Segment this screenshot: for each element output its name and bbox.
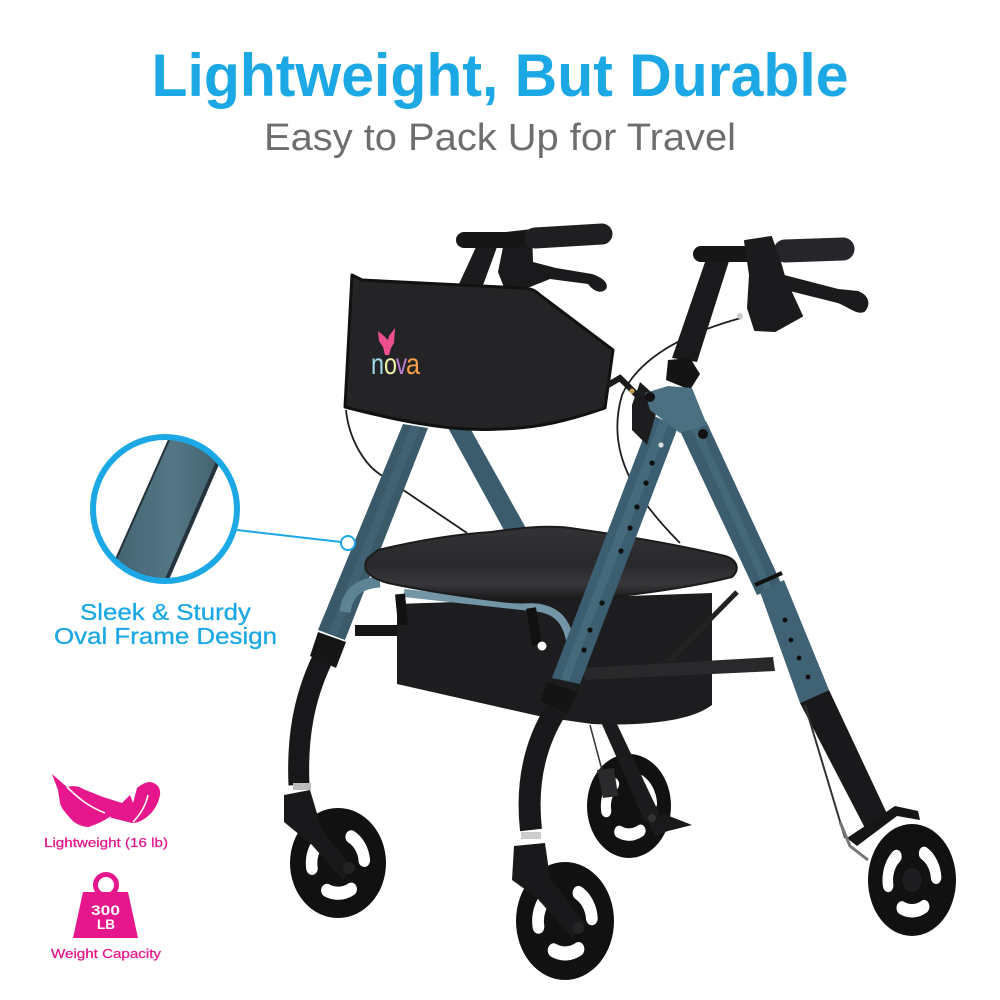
callout caption bbox=[54, 599, 277, 649]
subtitle: Easy to Pack Up for Travel bbox=[264, 117, 736, 159]
right rear tube bbox=[680, 421, 829, 703]
right rear black leg bbox=[800, 690, 890, 830]
back strut bbox=[447, 426, 527, 532]
nova logo wordmark bbox=[371, 348, 420, 381]
cable, rear bbox=[346, 318, 741, 543]
rear centre wheel bbox=[587, 722, 692, 858]
pivot joint bbox=[608, 378, 708, 445]
right rear cable bbox=[805, 705, 845, 838]
cross bar bbox=[355, 592, 775, 680]
icon: feather bbox=[52, 774, 160, 827]
nova logo wordmark: o bbox=[384, 348, 397, 381]
feather label: Lightweight (16 lb) bbox=[44, 835, 168, 850]
nova logo wordmark: n bbox=[371, 348, 384, 381]
icon: weight 300 lb bbox=[73, 874, 138, 938]
front black leg and collar bbox=[521, 682, 578, 839]
front main tube with adjustment holes bbox=[552, 415, 678, 684]
front handle post and brake lever bbox=[666, 237, 867, 390]
front caster wheel bbox=[512, 843, 614, 980]
under-seat basket bbox=[397, 593, 712, 724]
left frame tube bbox=[318, 424, 428, 640]
callout caption: Sleek & Sturdy bbox=[80, 599, 252, 625]
icon: weight 300 lb: 300 bbox=[91, 902, 120, 918]
callout caption: Oval Frame Design bbox=[54, 623, 277, 649]
weight label: Weight Capacity bbox=[51, 946, 162, 961]
rear handle post and lever bbox=[459, 229, 607, 292]
seat rails bbox=[345, 582, 570, 650]
backrest with nova logo bbox=[345, 275, 613, 429]
nova logo butterfly bbox=[378, 328, 395, 355]
left caster wheel and leg bbox=[284, 632, 386, 918]
inset detail circle: oval frame bbox=[90, 434, 240, 584]
rollator walker product illustration bbox=[284, 229, 956, 980]
icon: weight 300 lb: LB bbox=[97, 916, 115, 932]
callout leader line bbox=[237, 530, 355, 550]
seat cushion bbox=[365, 527, 737, 602]
right wheel with fender bbox=[840, 806, 956, 936]
title: Lightweight, But Durable bbox=[152, 42, 848, 109]
nova logo wordmark: v bbox=[396, 348, 407, 381]
nova logo wordmark: a bbox=[406, 348, 420, 381]
